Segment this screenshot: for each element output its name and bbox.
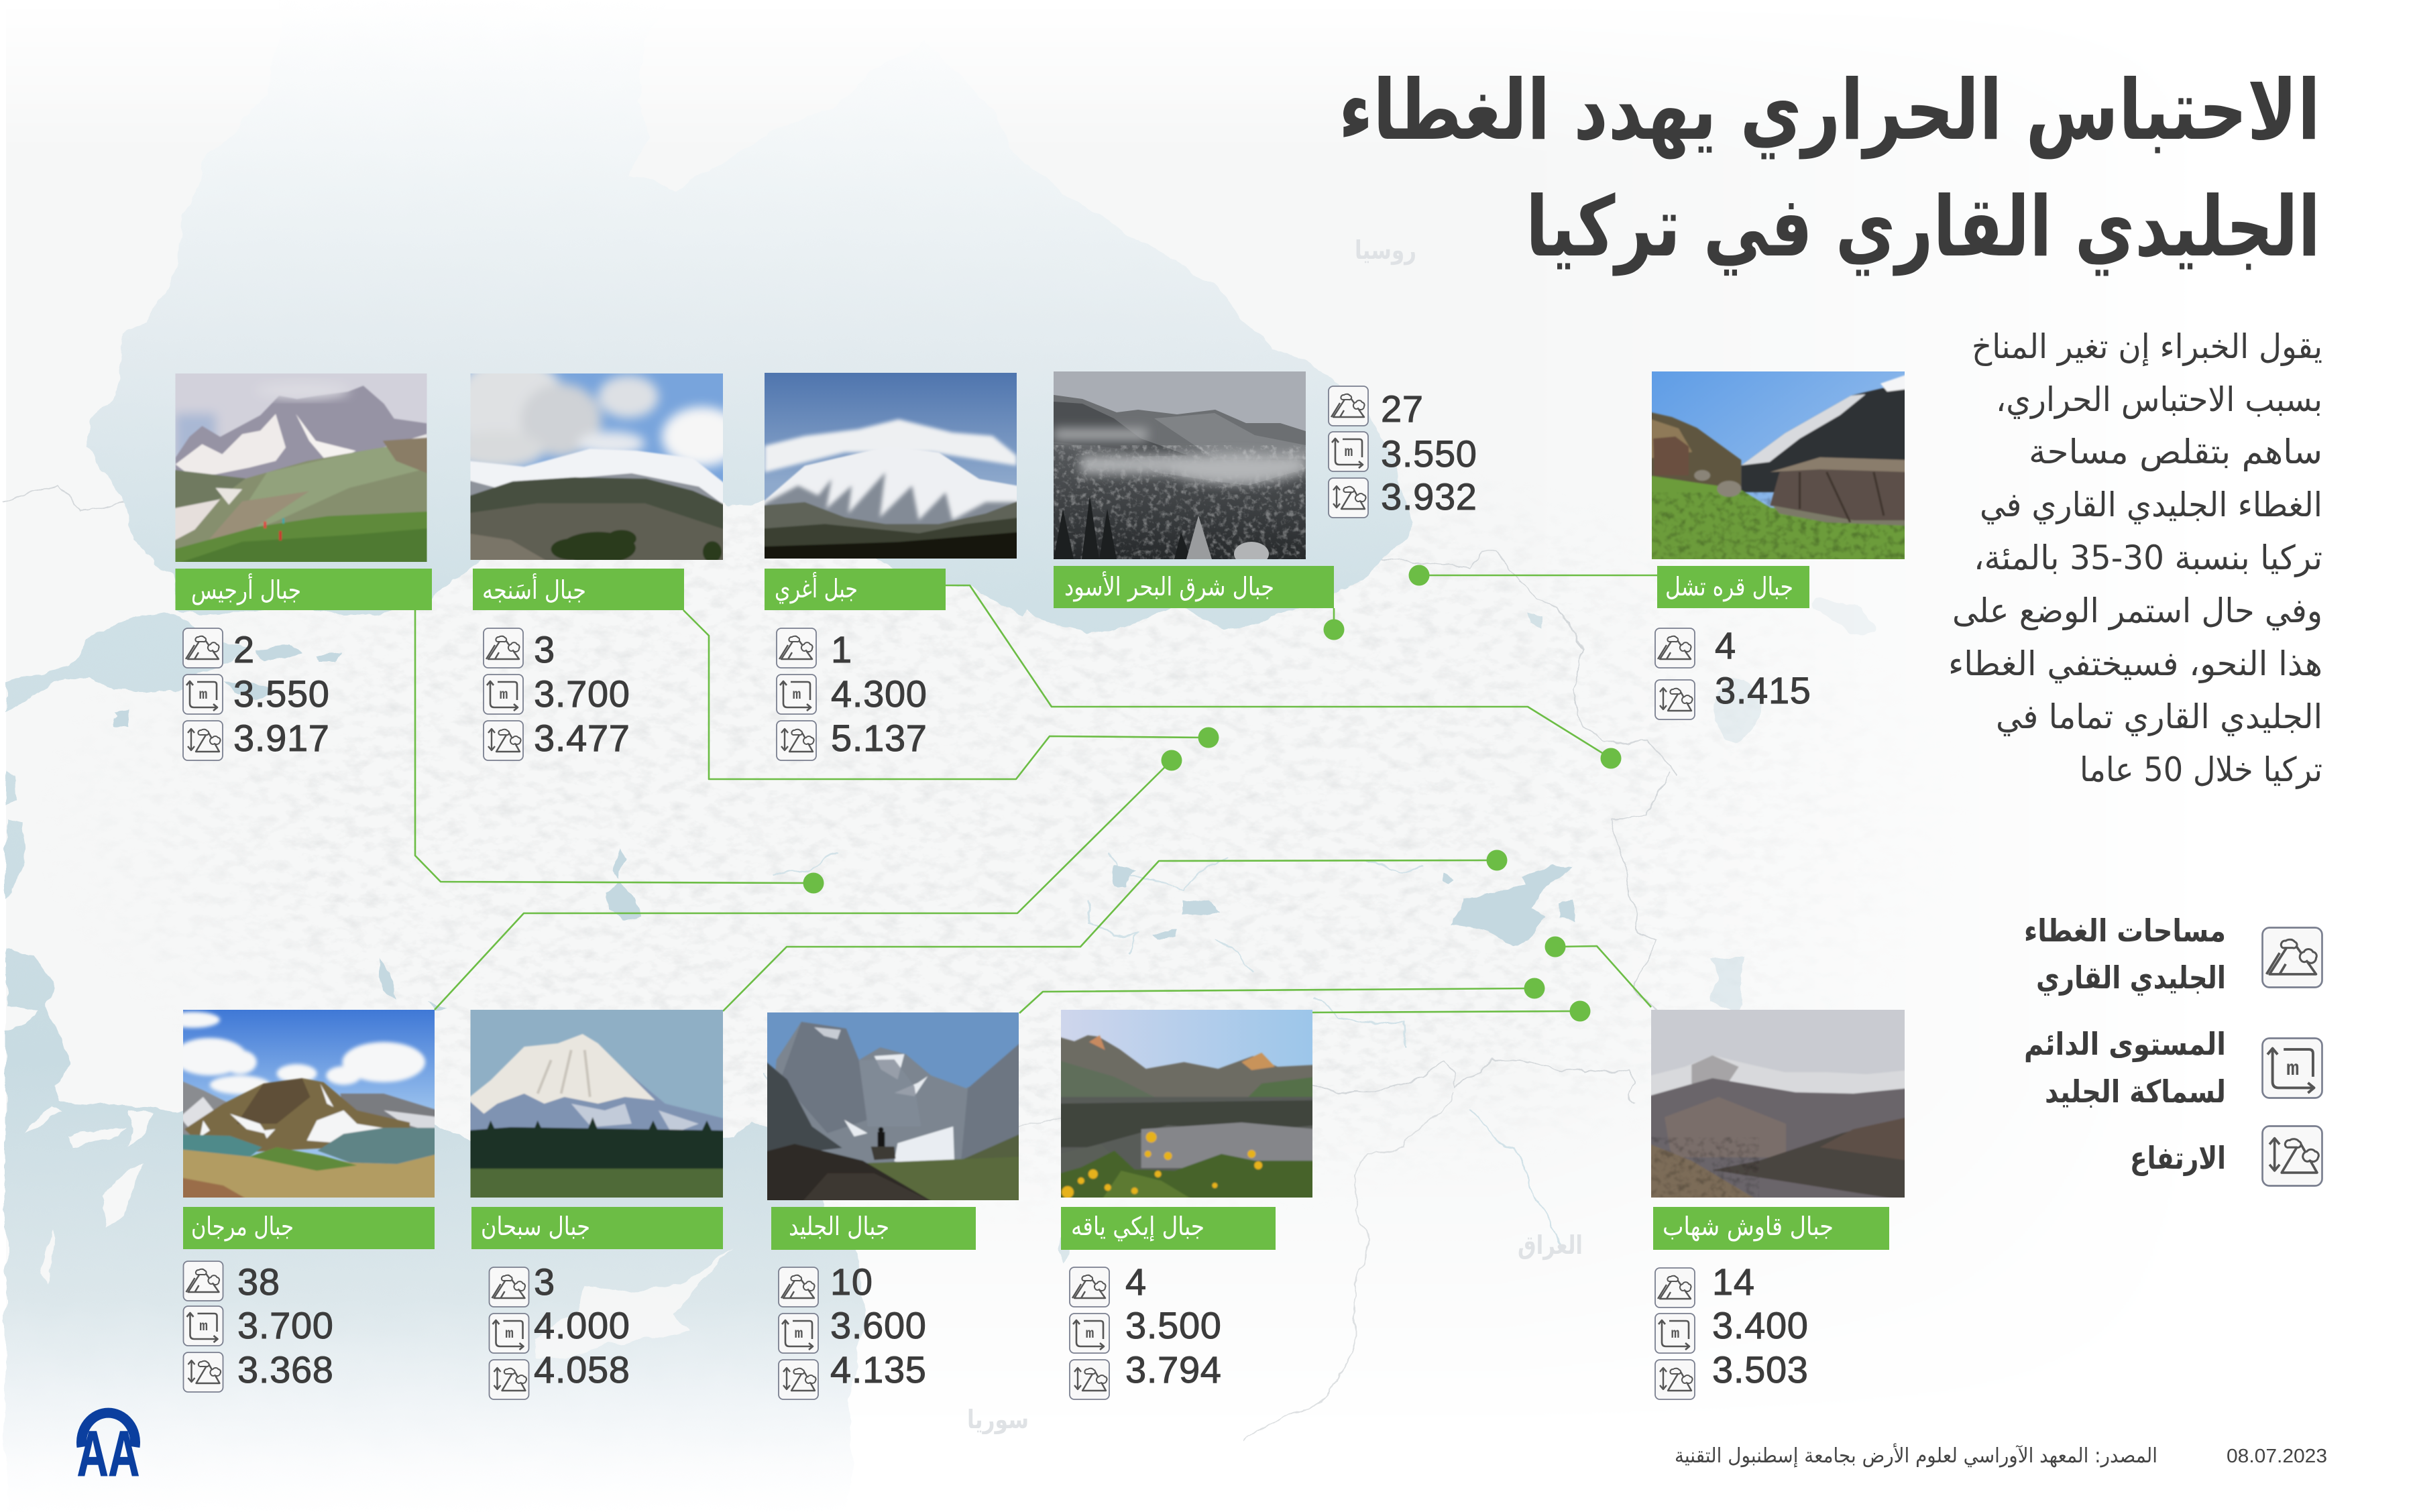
intro paragraph: تركيا خلال 50 عاما <box>2080 750 2322 789</box>
glacier count: 14 <box>1712 1261 1755 1303</box>
glacier count icon <box>1329 386 1368 426</box>
legend: glacier areas <box>2024 913 2322 996</box>
elevation icon <box>1655 1360 1695 1399</box>
country label: Iraq: العراق <box>1518 1230 1583 1260</box>
name: جبال قاوش شهاب <box>1663 1212 1834 1242</box>
panel: Mount Ararat <box>761 373 1020 760</box>
photo <box>471 373 723 560</box>
logo: Anadolu Agency: AA <box>77 1418 139 1490</box>
intro paragraph: الغطاء الجليدي القاري في <box>1980 485 2322 524</box>
elevation icon <box>1329 478 1368 518</box>
photo <box>1652 371 1905 559</box>
photo <box>765 373 1017 559</box>
glacier count: 3 <box>534 1261 555 1303</box>
intro paragraph: الجليدي القاري تماما في <box>1996 697 2322 736</box>
photo <box>1054 371 1306 559</box>
panel: Cilo mountains <box>764 1012 1022 1399</box>
thickness icon <box>777 675 816 714</box>
glacier count: 3 <box>534 628 555 671</box>
date: 08.07.2023 <box>2227 1446 2327 1467</box>
name banner <box>183 1207 435 1249</box>
thickness: 3.500 <box>1125 1304 1222 1346</box>
panel: Erciyes mountains <box>172 370 432 760</box>
connector lines and location dots <box>415 565 1657 1022</box>
panel: Kara Deniz Kackar mountains <box>1648 371 1908 719</box>
photo <box>183 1010 435 1198</box>
glacier count icon <box>779 1267 818 1307</box>
thickness icon <box>1329 432 1368 471</box>
glacier count: 27 <box>1381 388 1424 430</box>
legend: elevation: الارتفاع <box>2130 1140 2226 1176</box>
intro paragraph: ساهم بتقلص مساحة <box>2029 432 2322 471</box>
thickness: 3.550 <box>233 673 330 715</box>
thickness: 3.700 <box>534 673 630 715</box>
elevation: 4.058 <box>534 1348 630 1391</box>
glacier count: 4 <box>1715 624 1736 666</box>
elevation icon <box>484 721 523 760</box>
glacier count: 38 <box>237 1261 280 1303</box>
thickness: 4.300 <box>831 673 928 715</box>
legend: glacier areas: مساحات الغطاء <box>2024 913 2226 949</box>
glacier count: 10 <box>830 1261 873 1303</box>
thickness: 3.700 <box>237 1304 334 1346</box>
intro paragraph <box>1948 327 2322 789</box>
elevation icon <box>1070 1360 1109 1399</box>
photo <box>1648 1010 1908 1201</box>
photo <box>176 373 427 562</box>
glacier count icon <box>1655 628 1695 668</box>
photo <box>471 1010 723 1198</box>
thickness icon <box>490 1314 528 1353</box>
name: جبال شرق البحر الأسود <box>1064 571 1274 602</box>
elevation icon <box>184 1352 223 1392</box>
legend: permanent ice thickness level <box>2024 1026 2322 1110</box>
seas <box>6 0 1412 1512</box>
thickness icon <box>779 1314 818 1353</box>
glacier count icon <box>1655 1268 1695 1307</box>
thickness icon <box>1070 1314 1109 1353</box>
elevation: 3.503 <box>1712 1348 1809 1391</box>
name: جبال سبحان <box>481 1212 590 1241</box>
name: جبال الجليد <box>789 1212 889 1241</box>
glacier count: 4 <box>1125 1261 1147 1303</box>
name banner <box>473 569 684 610</box>
panel: Esence mountains <box>450 357 742 760</box>
name banner <box>771 1207 976 1250</box>
intro paragraph: يقول الخبراء إن تغير المناخ <box>1972 327 2322 367</box>
elevation: 3.368 <box>237 1348 334 1391</box>
elevation icon <box>779 1360 818 1399</box>
glacier count icon <box>1070 1267 1109 1307</box>
glacier count icon <box>777 628 816 668</box>
lakes <box>113 592 1880 1261</box>
thickness: 3.600 <box>830 1304 927 1346</box>
elevation icon <box>1655 680 1695 719</box>
photo <box>1058 1010 1316 1201</box>
glacier count: 1 <box>831 628 852 671</box>
legend: elevation <box>2130 1126 2322 1185</box>
thickness: 3.400 <box>1712 1304 1809 1346</box>
panel: Ikiyaka mountains <box>1058 1010 1316 1399</box>
name banner <box>765 569 946 610</box>
intro paragraph: وفي حال استمر الوضع على <box>1952 591 2322 631</box>
intro paragraph: تركيا بنسبة 30-35 بالمئة، <box>1974 538 2322 577</box>
name: جبال مرجان <box>191 1212 294 1242</box>
thickness icon <box>1655 1314 1695 1353</box>
elevation icon <box>777 721 816 760</box>
glacier count icon <box>490 1267 528 1307</box>
glacier count icon <box>184 1261 223 1301</box>
legend: permanent ice thickness level: لسماكة الجليد <box>2045 1073 2226 1110</box>
country label: Syria: سوريا <box>967 1405 1029 1434</box>
legend: glacier areas: الجليدي القاري <box>2036 959 2226 996</box>
name banner <box>176 569 432 610</box>
thickness icon <box>183 675 223 714</box>
name: جبال إيكي ياقه <box>1071 1212 1204 1242</box>
name banner <box>1061 1207 1276 1250</box>
intro paragraph: هذا النحو، فسيختفي الغطاء <box>1948 644 2322 683</box>
name banner <box>471 1207 723 1249</box>
elevation: 5.137 <box>831 717 928 759</box>
glacier count icon <box>183 628 223 668</box>
name: جبال قره تشل <box>1665 572 1793 602</box>
country label: Russia: روسيا <box>1355 235 1416 266</box>
background map of Turkey and surroundings <box>2 83 1876 1448</box>
elevation icon <box>183 721 223 760</box>
elevation: 3.794 <box>1125 1348 1222 1391</box>
source: المصدر: المعهد الآوراسي لعلوم الأرض بجامعة إسطنبول التقنية <box>1675 1442 2157 1468</box>
name: جبال أرجيس <box>191 573 301 605</box>
glacier count: 2 <box>233 628 255 671</box>
name banner <box>1657 566 1809 608</box>
islands and Cyprus <box>6 691 734 1358</box>
panel: Suphan mountains <box>467 1010 726 1399</box>
intro paragraph: بسبب الاحتباس الحراري، <box>1996 380 2322 419</box>
name banner <box>1054 566 1334 608</box>
name banner <box>1653 1207 1889 1250</box>
thickness icon <box>484 675 523 714</box>
legend: permanent ice thickness level: المستوى الدائم <box>2024 1026 2226 1062</box>
elevation icon <box>490 1360 528 1399</box>
thickness: 4.000 <box>534 1304 630 1346</box>
glacier count icon <box>484 628 523 668</box>
panel: Eastern Black Sea mountains <box>1054 371 1477 608</box>
elevation: 3.932 <box>1381 475 1477 518</box>
elevation: 3.477 <box>534 717 630 759</box>
panel: Mercan mountains <box>166 1010 438 1392</box>
name: جبال أسَنجه <box>482 573 586 605</box>
panel: Kavus Sehap mountains <box>1648 1010 1908 1399</box>
photo <box>767 1012 1019 1200</box>
thickness: 3.550 <box>1381 432 1477 475</box>
elevation: 3.415 <box>1715 669 1811 711</box>
logo: Anadolu Agency <box>77 1413 139 1490</box>
legend <box>2024 913 2322 1185</box>
elevation: 4.135 <box>830 1348 927 1391</box>
title <box>1339 62 2320 276</box>
elevation: 3.917 <box>233 717 330 759</box>
name: جبل أغري <box>775 572 858 604</box>
thickness icon <box>184 1306 223 1346</box>
